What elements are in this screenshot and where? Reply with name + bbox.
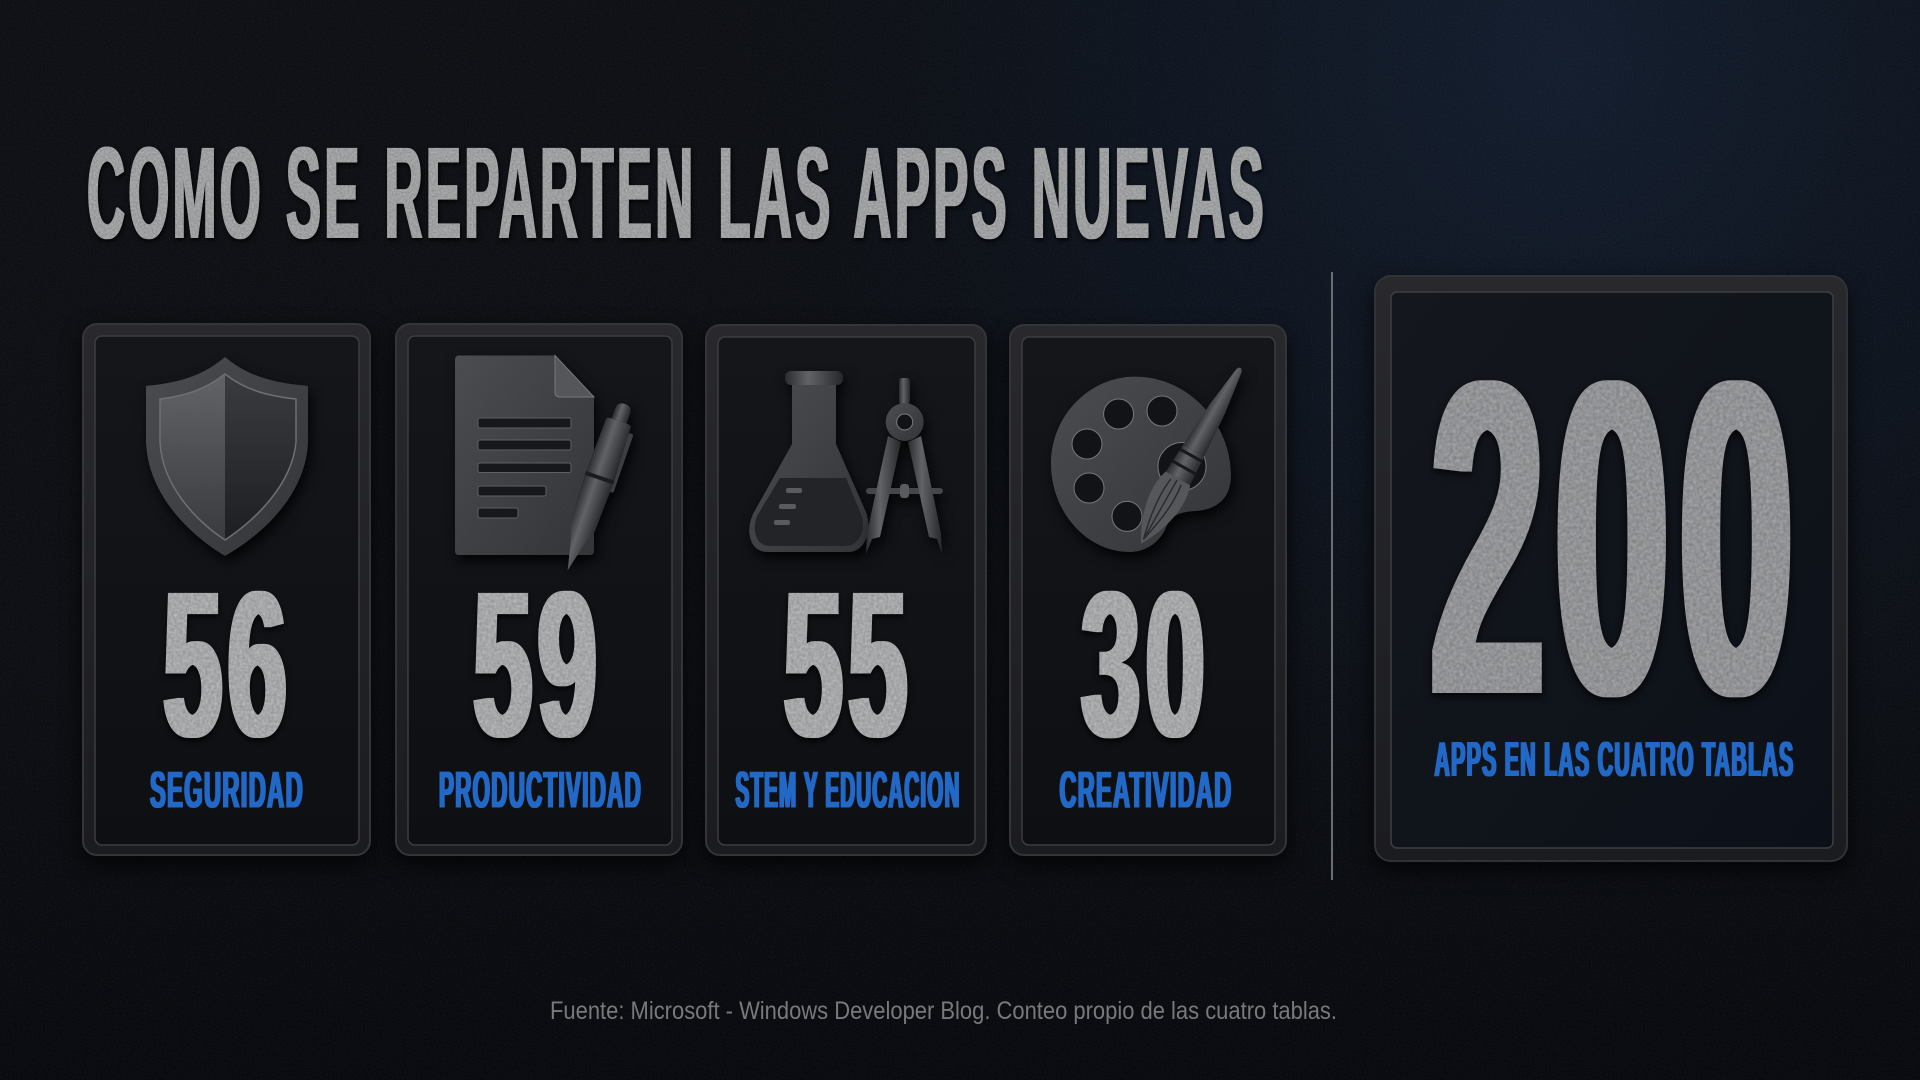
panel: stem y educacion (706, 325, 986, 855)
divider (1331, 272, 1333, 880)
icon: brush (1126, 359, 1255, 552)
icon: pen (554, 399, 642, 576)
icon: flask (749, 371, 869, 552)
icon: compass (866, 378, 943, 554)
number: 55: 55 (784, 549, 912, 781)
icon: document with pen (455, 356, 642, 576)
panel: total (1375, 276, 1847, 861)
panel: productividad: PRODUCTIVIDAD (439, 762, 642, 820)
number: 59: 59 (473, 549, 602, 781)
panel: creatividad: CREATIVIDAD (1060, 762, 1232, 820)
panel: seguridad: SEGURIDAD (150, 762, 304, 820)
icon: palette (1051, 359, 1255, 552)
panel: productividad (396, 324, 682, 855)
number: 30: 30 (1081, 549, 1210, 781)
panel: creatividad (1010, 325, 1286, 855)
source note: Fuente: Microsoft - Windows Developer Blog. Conteo propio de las cuatro tablas. (550, 997, 1337, 1025)
panel: seguridad (83, 324, 370, 855)
number: 56: 56 (163, 549, 292, 781)
icon: shield (146, 357, 308, 556)
text: STEM Y EDUCACION (736, 762, 960, 820)
